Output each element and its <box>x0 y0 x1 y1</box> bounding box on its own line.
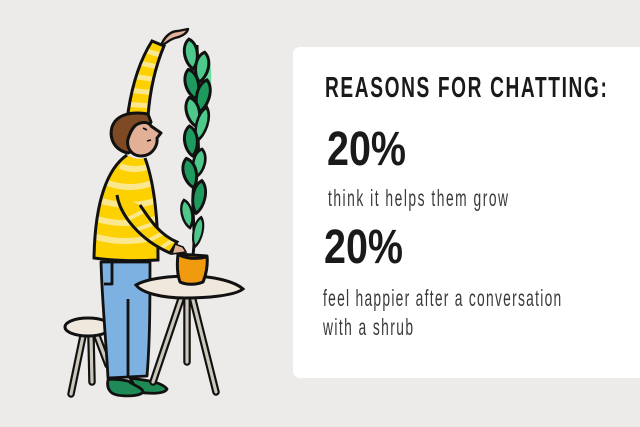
plant <box>179 38 213 255</box>
stat: second 20%: 20% <box>324 221 403 274</box>
stat text: grow: think it helps them grow <box>328 187 508 212</box>
stat text: happier line 2: with a shrub <box>322 316 413 341</box>
sweater torso <box>90 155 162 261</box>
stool <box>65 318 111 394</box>
forearm <box>117 195 186 254</box>
raised arm <box>125 29 188 116</box>
stat: first 20%: 20% <box>327 123 406 176</box>
pot <box>177 254 207 284</box>
heading: REASONS FOR CHATTING: <box>325 72 607 104</box>
stat text: happier line 1: feel happier after a conversation <box>323 287 561 312</box>
shoes <box>108 378 167 396</box>
table <box>136 276 243 392</box>
head <box>111 113 161 156</box>
jeans <box>101 262 150 378</box>
infographic canvas <box>64 28 640 398</box>
panel: reasons for chatting <box>293 47 640 378</box>
hand <box>162 29 188 45</box>
illustration: person with plant at table <box>65 29 243 396</box>
